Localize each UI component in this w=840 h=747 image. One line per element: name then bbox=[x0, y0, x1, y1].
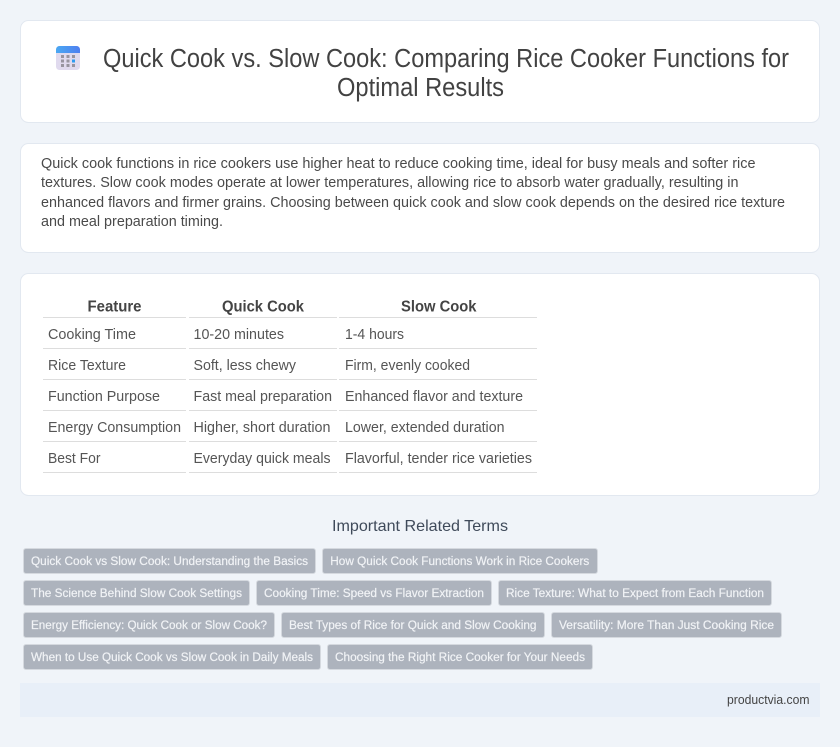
table header bbox=[43, 298, 537, 318]
table row: energy consumption bbox=[43, 420, 537, 442]
title bbox=[103, 45, 789, 102]
tag bbox=[24, 612, 274, 638]
tag bbox=[328, 644, 592, 670]
tag: How Quick Cook Functions Work in Rice Cookers bbox=[330, 554, 589, 568]
table row: function purpose bbox=[43, 389, 537, 410]
tag: The Science Behind Slow Cook Settings bbox=[31, 586, 242, 600]
tag: Versatility: More Than Just Cooking Rice bbox=[559, 618, 774, 632]
table row: rice texture bbox=[43, 358, 537, 380]
table row: best for bbox=[43, 451, 537, 472]
tag bbox=[552, 612, 782, 638]
table row: function purpose: Enhanced flavor and texture bbox=[345, 389, 523, 405]
table row: best for: Everyday quick meals bbox=[194, 451, 330, 467]
tag: Energy Efficiency: Quick Cook or Slow Cook? bbox=[31, 618, 267, 632]
title: Quick Cook vs. Slow Cook: Comparing Rice Cooker Functions for bbox=[103, 45, 789, 73]
panel: summary paragraph bbox=[20, 144, 820, 252]
table row: cooking time bbox=[43, 327, 537, 348]
table row: cooking time: 1-4 hours bbox=[345, 327, 404, 343]
tag: Cooking Time: Speed vs Flavor Extraction bbox=[264, 586, 484, 600]
text block: summary: Quick cook functions in rice cookers use higher heat to reduce cooking time, ideal for busy meals and softer rice bbox=[41, 156, 756, 172]
table row: function purpose: Fast meal preparation bbox=[194, 389, 332, 405]
table row: energy consumption: Energy Consumption bbox=[48, 420, 181, 436]
table row: best for: Flavorful, tender rice varieties bbox=[345, 451, 532, 467]
panel: related term tags bbox=[24, 548, 782, 670]
table row: cooking time: Cooking Time bbox=[48, 327, 136, 343]
tag bbox=[498, 580, 772, 606]
icon: calendar bbox=[56, 46, 80, 70]
panel: header bbox=[20, 20, 820, 122]
title: Optimal Results bbox=[337, 74, 504, 102]
tag bbox=[24, 580, 250, 606]
footer bbox=[20, 683, 820, 717]
table header: Slow Cook bbox=[401, 298, 477, 316]
table row: function purpose: Function Purpose bbox=[48, 389, 160, 405]
tag: Rice Texture: What to Expect from Each Function bbox=[506, 586, 764, 600]
text block: summary: and meal preparation timing. bbox=[41, 214, 223, 230]
table row: energy consumption: Lower, extended duration bbox=[345, 420, 504, 436]
table row: rice texture: Firm, evenly cooked bbox=[345, 358, 470, 374]
table row: best for: Best For bbox=[48, 451, 101, 467]
tag bbox=[24, 644, 320, 670]
tag: When to Use Quick Cook vs Slow Cook in Daily Meals bbox=[31, 650, 313, 664]
panel: comparison table bbox=[20, 274, 820, 496]
table header: Feature bbox=[88, 298, 142, 316]
heading: important related terms: Important Related Terms bbox=[332, 518, 508, 535]
tag bbox=[322, 548, 598, 574]
table row: rice texture: Soft, less chewy bbox=[194, 358, 297, 374]
table header: Quick Cook bbox=[222, 298, 304, 316]
footer: productvia.com bbox=[727, 692, 810, 707]
table row: cooking time: 10-20 minutes bbox=[194, 327, 284, 343]
tag bbox=[256, 580, 492, 606]
text block: summary: enhanced flavors and firmer grains. Choosing between quick cook and slow cook depends on the desired rice texture bbox=[41, 195, 785, 211]
tag: Quick Cook vs Slow Cook: Understanding the Basics bbox=[31, 554, 308, 568]
table row: rice texture: Rice Texture bbox=[48, 358, 126, 374]
tag bbox=[24, 548, 316, 574]
tag: Choosing the Right Rice Cooker for Your Needs bbox=[335, 650, 585, 664]
text block: summary bbox=[41, 156, 785, 230]
text block: summary: textures. Slow cook modes operate at lower temperatures, allowing rice to absorb water gradually, resulting in bbox=[41, 175, 738, 191]
table row: energy consumption: Higher, short duration bbox=[194, 420, 330, 436]
tag: Best Types of Rice for Quick and Slow Cooking bbox=[289, 618, 536, 632]
tag bbox=[282, 612, 544, 638]
